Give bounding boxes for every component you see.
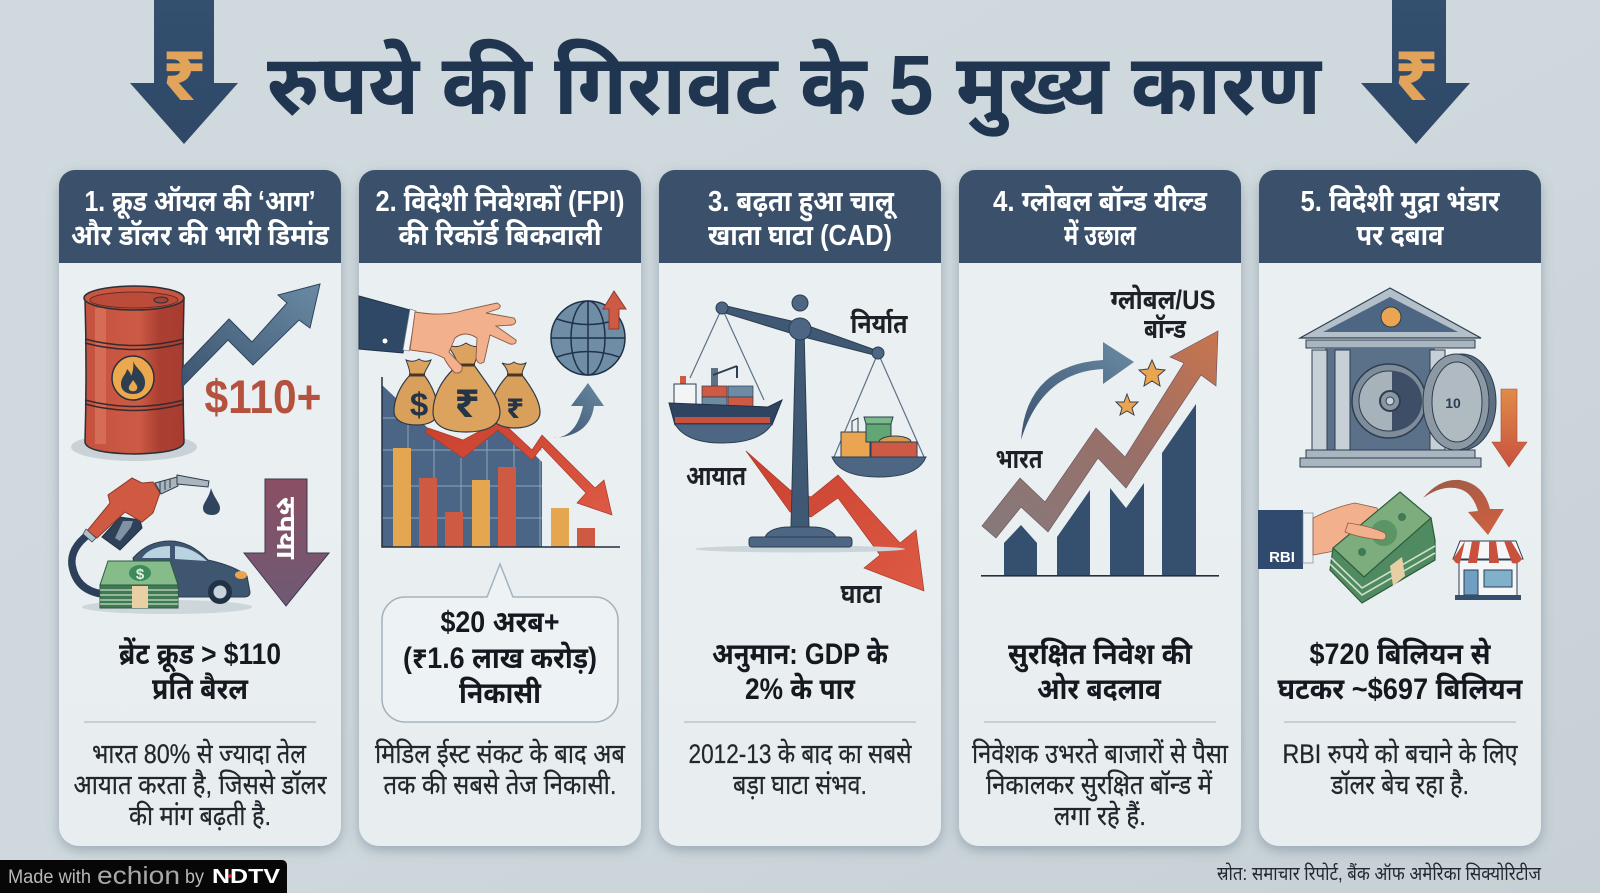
label: imports: आयात [686, 461, 747, 491]
icon: hand with RBI sleeve: RBI [1269, 549, 1295, 566]
description: भारत 80% से ज्यादा तेल [92, 738, 307, 769]
label: global bonds: बॉन्ड [1144, 314, 1187, 344]
card 2 heading [359, 170, 641, 263]
card 1 heading: और डॉलर की भारी डिमांड [71, 219, 329, 252]
icon: globe with arrow [551, 291, 626, 438]
card 1 heading [59, 170, 341, 263]
description: आयात करता है, जिससे डॉलर [74, 769, 327, 800]
chart: falling bars [382, 377, 620, 547]
icon: rupee down arrow: रुपया [271, 497, 301, 560]
label: global bonds [1110, 285, 1216, 344]
icon: arrow to shop [1423, 480, 1504, 535]
key figure [119, 637, 281, 706]
description [74, 738, 327, 831]
icon: bank with vault [1300, 288, 1496, 467]
icon: oil barrel [71, 286, 197, 461]
label: deficit: घाटा [840, 579, 882, 609]
icon: rising yield arrow [982, 331, 1218, 538]
icon: banknote stack [1330, 492, 1435, 603]
key figure: 2% के पार [745, 671, 856, 706]
icon: shop [1453, 541, 1523, 600]
key figure: घटकर ~$697 बिलियन [1278, 672, 1523, 706]
card 4 heading: 4. ग्लोबल बॉन्ड यील्ड [993, 185, 1207, 218]
card 3 body [659, 170, 941, 846]
source note: स्रोत: समाचार रिपोर्ट, बैंक ऑफ अमेरिका सिक्योरिटीज [1217, 862, 1542, 885]
key figure: $720 बिलियन से [1310, 636, 1491, 671]
key figure [1278, 636, 1523, 706]
icon: money bags: ₹ [454, 378, 480, 427]
chart: yield bars [981, 404, 1219, 577]
icon: balance scale [690, 295, 924, 552]
label: global bonds: ग्लोबल/US [1110, 285, 1216, 315]
description: डॉलर बेच रहा है. [1330, 769, 1469, 800]
card 4 body [959, 170, 1241, 846]
watermark bar: by [185, 867, 204, 888]
icon: deficit arrow [746, 451, 924, 591]
icon: hand with sleeve [359, 296, 516, 373]
watermark bar [0, 860, 287, 893]
icon: left falling rupee arrow: ₹ [162, 29, 206, 117]
card 4 heading [959, 170, 1241, 263]
card 2 body [359, 170, 641, 846]
description: 2012-13 के बाद का सबसे [688, 738, 912, 769]
panel: global bond yields [959, 170, 1241, 846]
icon: rupee down arrow [244, 479, 329, 606]
card 3 heading [659, 170, 941, 263]
icon: stars [1116, 360, 1165, 415]
description: तक की सबसे तेज निकासी. [384, 769, 616, 800]
icon: rising price arrow [182, 284, 320, 387]
card 5 heading: पर दबाव [1356, 220, 1444, 252]
icon: right falling rupee arrow [1361, 0, 1470, 144]
callout: outflow: $20 अरब+ [440, 606, 560, 639]
card 5 heading: 5. विदेशी मुद्रा भंडार [1300, 184, 1501, 219]
panel: crude oil [59, 170, 341, 846]
label: India: भारत [996, 444, 1044, 474]
description: की मांग बढ़ती है. [129, 800, 271, 831]
card 5 heading [1259, 170, 1541, 263]
icon: reserves down arrow [1492, 389, 1527, 467]
card 2 heading: 2. विदेशी निवेशकों (FPI) [376, 184, 624, 218]
icon: left falling rupee arrow [130, 0, 238, 144]
icon: capital flow arrow [1021, 342, 1134, 440]
key figure [1008, 636, 1193, 706]
icon: fuel nozzle, car and money [72, 475, 252, 614]
watermark bar: echion [97, 862, 180, 890]
description: निकालकर सुरक्षित बॉन्ड में [986, 769, 1213, 802]
card 2 heading: की रिकॉर्ड बिकवाली [398, 219, 602, 252]
callout: outflow [382, 564, 618, 722]
label: exports: निर्यात [850, 308, 909, 339]
icon: falling red arrow [425, 420, 612, 515]
description: लगा रहे हैं. [1054, 800, 1146, 831]
panel: current account deficit [659, 170, 941, 846]
icon: fuel nozzle, car and money: $ [136, 566, 145, 583]
icon: right falling rupee arrow: ₹ [1394, 29, 1438, 117]
icon: money bags [394, 343, 540, 432]
description: मिडिल ईस्ट संकट के बाद अब [375, 738, 626, 769]
panel: FPI selling [359, 170, 641, 846]
card 5 body [1259, 170, 1541, 846]
icon: hand with RBI sleeve [1258, 503, 1386, 569]
title: रुपये की गिरावट के 5 मुख्य कारण [267, 38, 1322, 136]
watermark bar: Made with [8, 867, 91, 888]
icon: money bags: ₹ [506, 390, 524, 425]
icon: cargo ship [669, 366, 782, 443]
callout: outflow: निकासी [459, 676, 542, 710]
card 3 heading: खाता घाटा (CAD) [708, 220, 892, 252]
key figure: प्रति बैरल [152, 671, 249, 706]
callout: outflow: (₹1.6 लाख करोड़) [403, 641, 597, 675]
card 4 heading: में उछाल [1064, 219, 1136, 252]
icon: bank with vault: 10 [1445, 395, 1461, 411]
description: बड़ा घाटा संभव. [733, 770, 867, 800]
watermark bar: NDTV [212, 866, 281, 888]
icon: goods on pan [832, 417, 926, 477]
card 1 heading: 1. क्रूड ऑयल की ‘आग’ [84, 185, 316, 219]
icon: money bags: $ [410, 386, 428, 423]
description: RBI रुपये को बचाने के लिए [1282, 738, 1518, 769]
description [375, 738, 626, 800]
panel: forex reserves [1258, 170, 1541, 846]
description [1282, 738, 1518, 800]
key figure: अनुमान: GDP के [712, 636, 889, 673]
key figure: सुरक्षित निवेश की [1008, 636, 1193, 673]
price label: $110+ [204, 370, 322, 423]
card 3 heading: 3. बढ़ता हुआ चालू [708, 186, 898, 222]
description [972, 738, 1229, 831]
description: निवेशक उभरते बाजारों से पैसा [972, 738, 1229, 769]
card 1 body [59, 170, 341, 846]
key figure: ओर बदलाव [1037, 672, 1162, 706]
key figure [712, 636, 889, 706]
description [688, 738, 912, 800]
key figure: ब्रेंट क्रूड > $110 [119, 637, 281, 673]
